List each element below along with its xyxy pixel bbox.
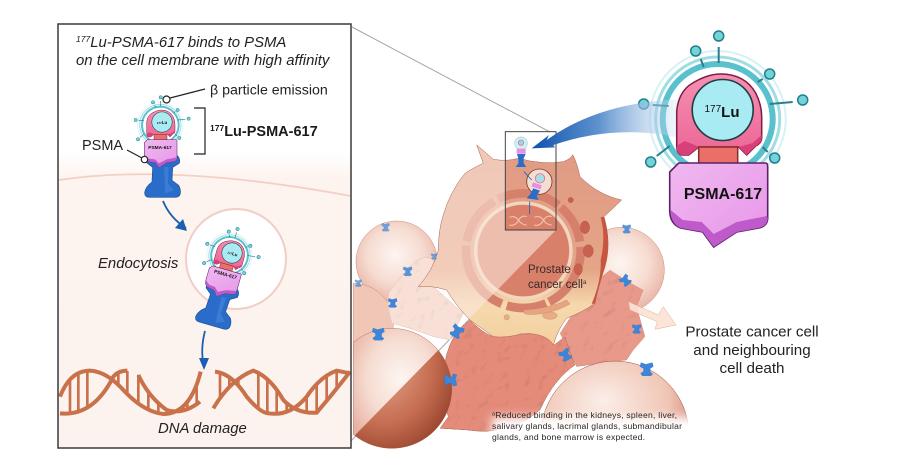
molecule on membrane <box>134 96 190 197</box>
footnote: a <box>492 412 496 418</box>
inset molecule on membrane <box>515 137 527 167</box>
177Lu label: Lu <box>721 104 740 121</box>
inset arrows <box>524 172 532 214</box>
panel: cell illustration <box>353 132 689 472</box>
arrow: enlargement pointer <box>532 99 682 148</box>
molecule in endosome <box>184 220 266 333</box>
footnote: Reduced binding in the kidneys, spleen, liver, <box>495 410 677 420</box>
cell membrane <box>59 174 351 196</box>
icon: enlarged 177Lu-PSMA-617 <box>532 31 808 247</box>
footnote: salivary glands, lacrimal glands, submandibular <box>492 421 682 431</box>
PSMA-617 label: PSMA-617 <box>684 186 762 203</box>
rough cell: left pale <box>388 257 463 340</box>
outcome text: and neighbouring <box>693 342 811 359</box>
panel border <box>58 24 351 448</box>
heading <box>76 34 331 69</box>
background cell: right sphere <box>602 227 665 310</box>
outcome text <box>685 324 819 377</box>
panel: mechanism <box>58 24 351 448</box>
DNA double helix <box>58 368 350 416</box>
inset endosome <box>527 169 552 200</box>
outcome text: cell death <box>719 360 785 377</box>
background cell: upper left sphere <box>356 221 437 302</box>
label: cancer cell line 2: cancer cell <box>528 279 583 291</box>
background cell: bottom right sphere <box>542 360 688 425</box>
main prostate cancer cell <box>417 143 623 347</box>
arrow: to DNA <box>199 331 209 370</box>
molecule on membrane: PSMA-617 <box>148 145 172 151</box>
footnote fade background <box>492 417 892 474</box>
molecule in endosome: 177Lu <box>227 250 238 257</box>
rough cell: right <box>560 270 645 367</box>
endosome <box>186 209 286 309</box>
callout: beta particle <box>163 82 328 103</box>
177Lu label: 177 <box>704 104 722 115</box>
label: endocytosis: Endocytosis <box>98 256 179 272</box>
callout: PSMA: PSMA <box>82 138 123 154</box>
background cell: left sphere <box>353 283 393 363</box>
footnote: glands, and bone marrow is expected. <box>492 432 645 442</box>
heading: Lu-PSMA-617 binds to PSMA <box>90 35 286 51</box>
molecule in endosome: PSMA-617 <box>213 269 238 281</box>
rough cell: bottom centre <box>435 320 575 431</box>
label: cancer cell line 2: a <box>583 280 587 286</box>
label: DNA damage: DNA damage <box>158 421 247 437</box>
label: prostate cancer cell: Prostate <box>528 264 571 276</box>
bracket <box>194 108 205 154</box>
arrow: cell death <box>628 302 676 329</box>
heading: on the cell membrane with high affinity <box>76 53 331 69</box>
inset box: binding detail <box>505 132 556 230</box>
receptors on cell surfaces <box>355 223 653 386</box>
inset DNA <box>509 216 552 225</box>
label: 177Lu-PSMA-617: 177 <box>210 123 224 133</box>
arrow: to endocytosis <box>163 201 187 231</box>
footnote <box>492 410 682 442</box>
molecule on membrane: 177Lu <box>157 120 168 125</box>
label: 177Lu-PSMA-617: Lu-PSMA-617 <box>224 124 318 140</box>
callout: PSMA <box>82 138 148 163</box>
footnote base background <box>498 432 900 474</box>
connector lines from panel to inset <box>351 27 556 441</box>
outcome text: Prostate cancer cell <box>685 324 819 340</box>
heading: 177 <box>76 34 90 44</box>
background cell: bottom left sphere <box>353 328 452 448</box>
callout: beta particle: β particle emission <box>210 82 328 98</box>
